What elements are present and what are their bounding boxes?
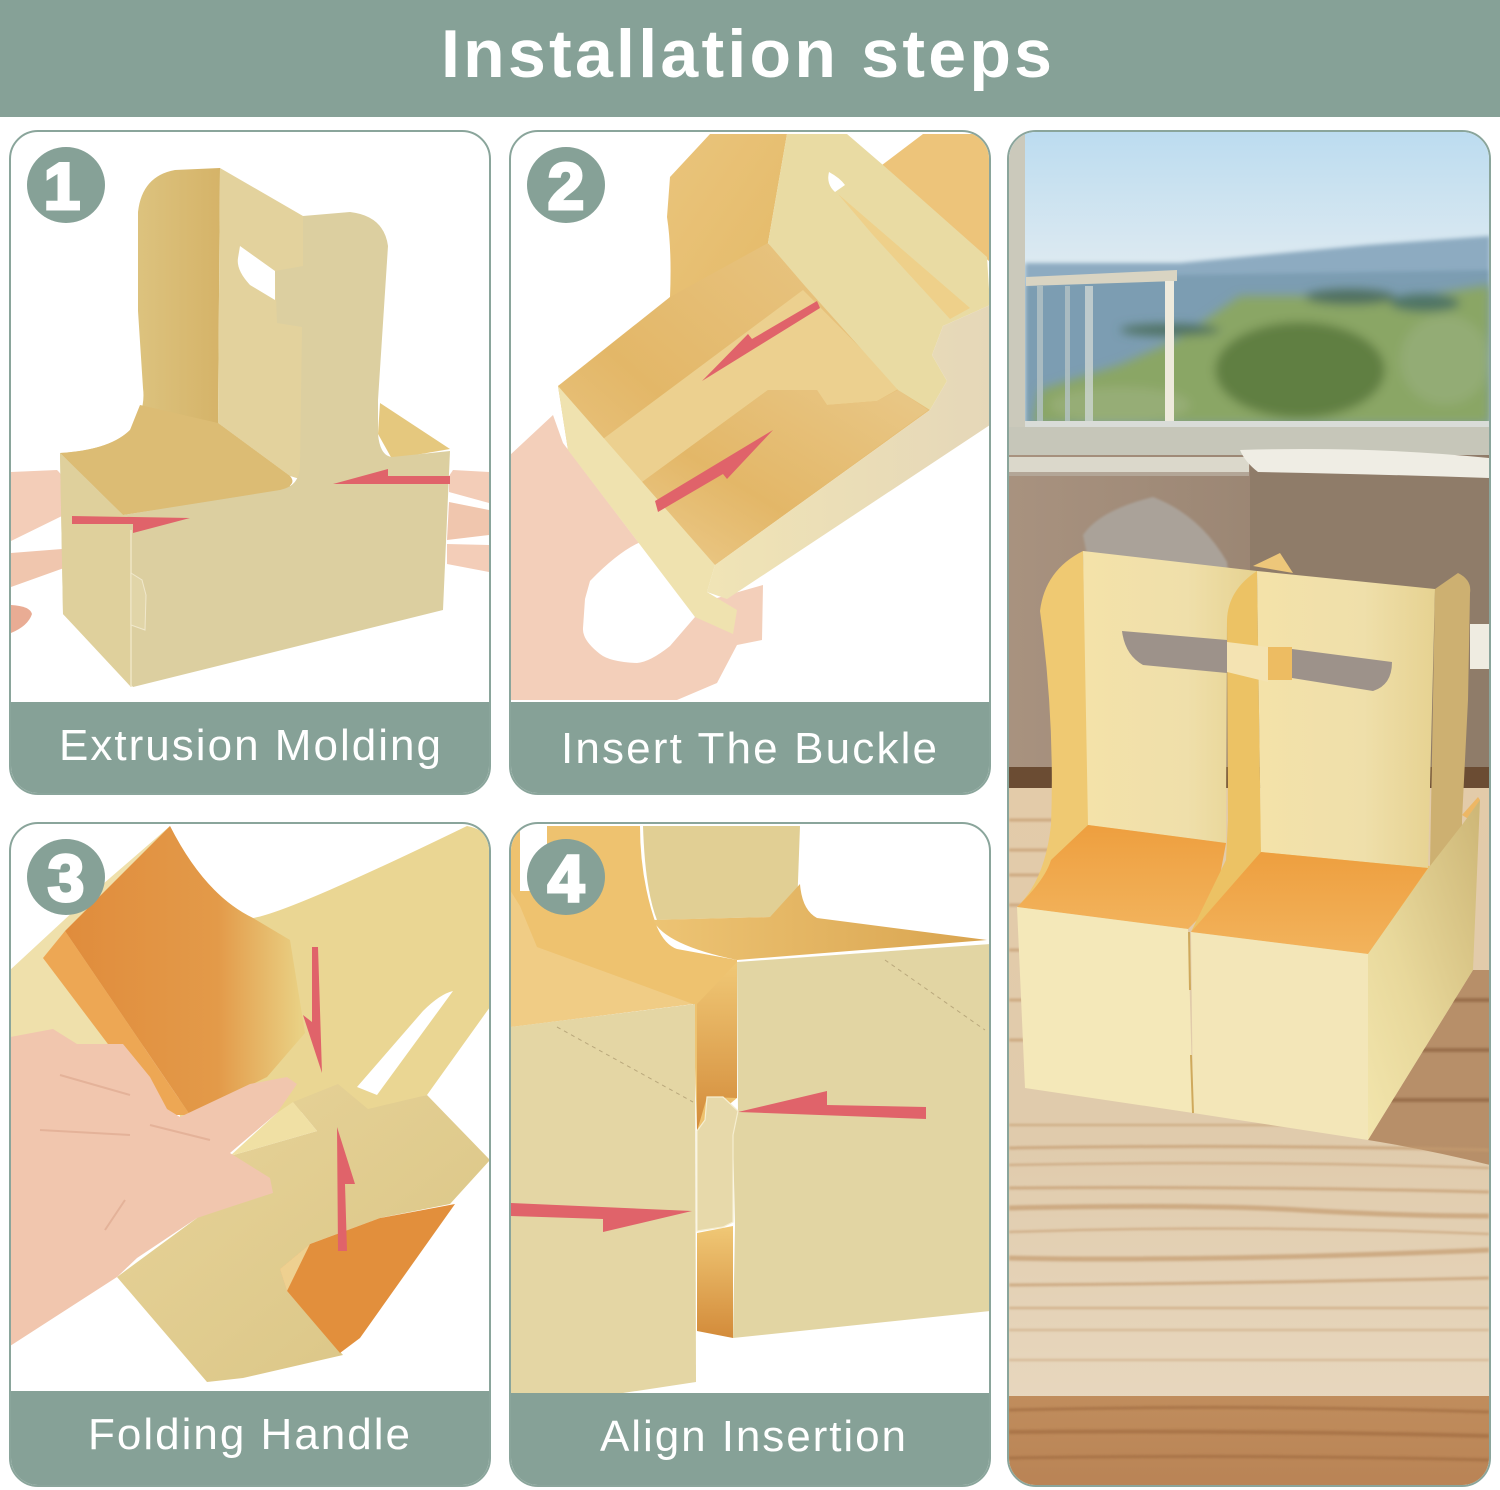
lower orange opening bbox=[280, 1204, 455, 1353]
window view bbox=[1009, 132, 1490, 432]
handle slot bbox=[238, 246, 275, 300]
spine and handle bbox=[768, 134, 990, 410]
upper flap bbox=[603, 290, 900, 485]
lower floor flap bbox=[638, 390, 928, 565]
title: Installation steps bbox=[441, 16, 1052, 92]
panel: step 2 insert the buckle bbox=[510, 131, 990, 794]
hand bbox=[510, 415, 763, 700]
handle slot bbox=[828, 172, 845, 192]
caption: insert the buckle: Insert The Buckle bbox=[561, 724, 937, 773]
center column bbox=[697, 1001, 737, 1130]
caption band bbox=[10, 1391, 490, 1486]
step number 3 bbox=[27, 839, 105, 915]
caption: align insertion: Align Insertion bbox=[600, 1412, 906, 1461]
step number 3: 3 bbox=[48, 841, 84, 915]
side tab bbox=[131, 573, 146, 630]
carrier left end bbox=[11, 826, 170, 1046]
carrier: box fronts bbox=[1017, 907, 1368, 1140]
hand bbox=[10, 1029, 297, 1346]
caption band bbox=[10, 702, 490, 794]
caption band bbox=[510, 702, 990, 794]
front left wall bbox=[558, 386, 737, 634]
arrows bbox=[738, 1091, 926, 1119]
carrier back panel bbox=[60, 168, 290, 515]
step number 1 bbox=[27, 147, 105, 223]
dashed fold lines bbox=[557, 960, 985, 1102]
folded handle bbox=[117, 1084, 490, 1382]
right handle bbox=[643, 826, 800, 920]
arrows bbox=[303, 947, 322, 1073]
handle slot bbox=[357, 991, 453, 1095]
step number 4: 4 bbox=[548, 841, 585, 915]
hands holding the carrier bbox=[11, 470, 489, 633]
caption: folding handle: Folding Handle bbox=[88, 1410, 410, 1459]
panel: finished carrier in room bbox=[1008, 131, 1490, 1490]
left interior bbox=[510, 826, 737, 1131]
panel: step 1 extrusion molding bbox=[10, 131, 490, 794]
front right wall bbox=[707, 305, 990, 599]
right compartment interior bbox=[653, 884, 987, 960]
carrier handle bbox=[170, 826, 490, 1120]
window frame bbox=[1009, 132, 1490, 457]
carrier floor bbox=[558, 243, 930, 565]
carrier: right unit bbox=[1191, 571, 1480, 1140]
step number 4 bbox=[527, 839, 605, 915]
buckle tab bbox=[697, 1097, 738, 1231]
caption: extrusion molding: Extrusion Molding bbox=[59, 721, 441, 770]
panel: step 4 align insertion bbox=[510, 823, 990, 1486]
carrier: left unit bbox=[1017, 551, 1293, 929]
orange side wall bbox=[43, 931, 190, 1115]
carrier back wall bbox=[558, 134, 787, 386]
left box bbox=[510, 1004, 696, 1393]
wall and sofa bbox=[1009, 449, 1490, 790]
carrier front panel bbox=[60, 212, 450, 687]
wood table bbox=[1009, 788, 1490, 1490]
light flap under finger bbox=[230, 1102, 317, 1156]
arrows bbox=[702, 301, 820, 381]
right box bbox=[733, 944, 990, 1338]
step number 1: 1 bbox=[44, 149, 80, 223]
header banner bbox=[0, 0, 1500, 117]
arrows bbox=[72, 516, 190, 533]
balcony railing bbox=[1026, 270, 1177, 424]
right compartment bbox=[378, 403, 450, 459]
panel: step 3 folding handle bbox=[10, 823, 490, 1486]
caption band bbox=[510, 1393, 990, 1486]
step number 2: 2 bbox=[548, 149, 584, 223]
gap between fingers and thumb bbox=[583, 541, 695, 663]
under tab orange bbox=[697, 1226, 733, 1338]
top right compartment bbox=[882, 134, 990, 262]
orange interior bbox=[65, 826, 305, 1115]
step number 2 bbox=[527, 147, 605, 223]
